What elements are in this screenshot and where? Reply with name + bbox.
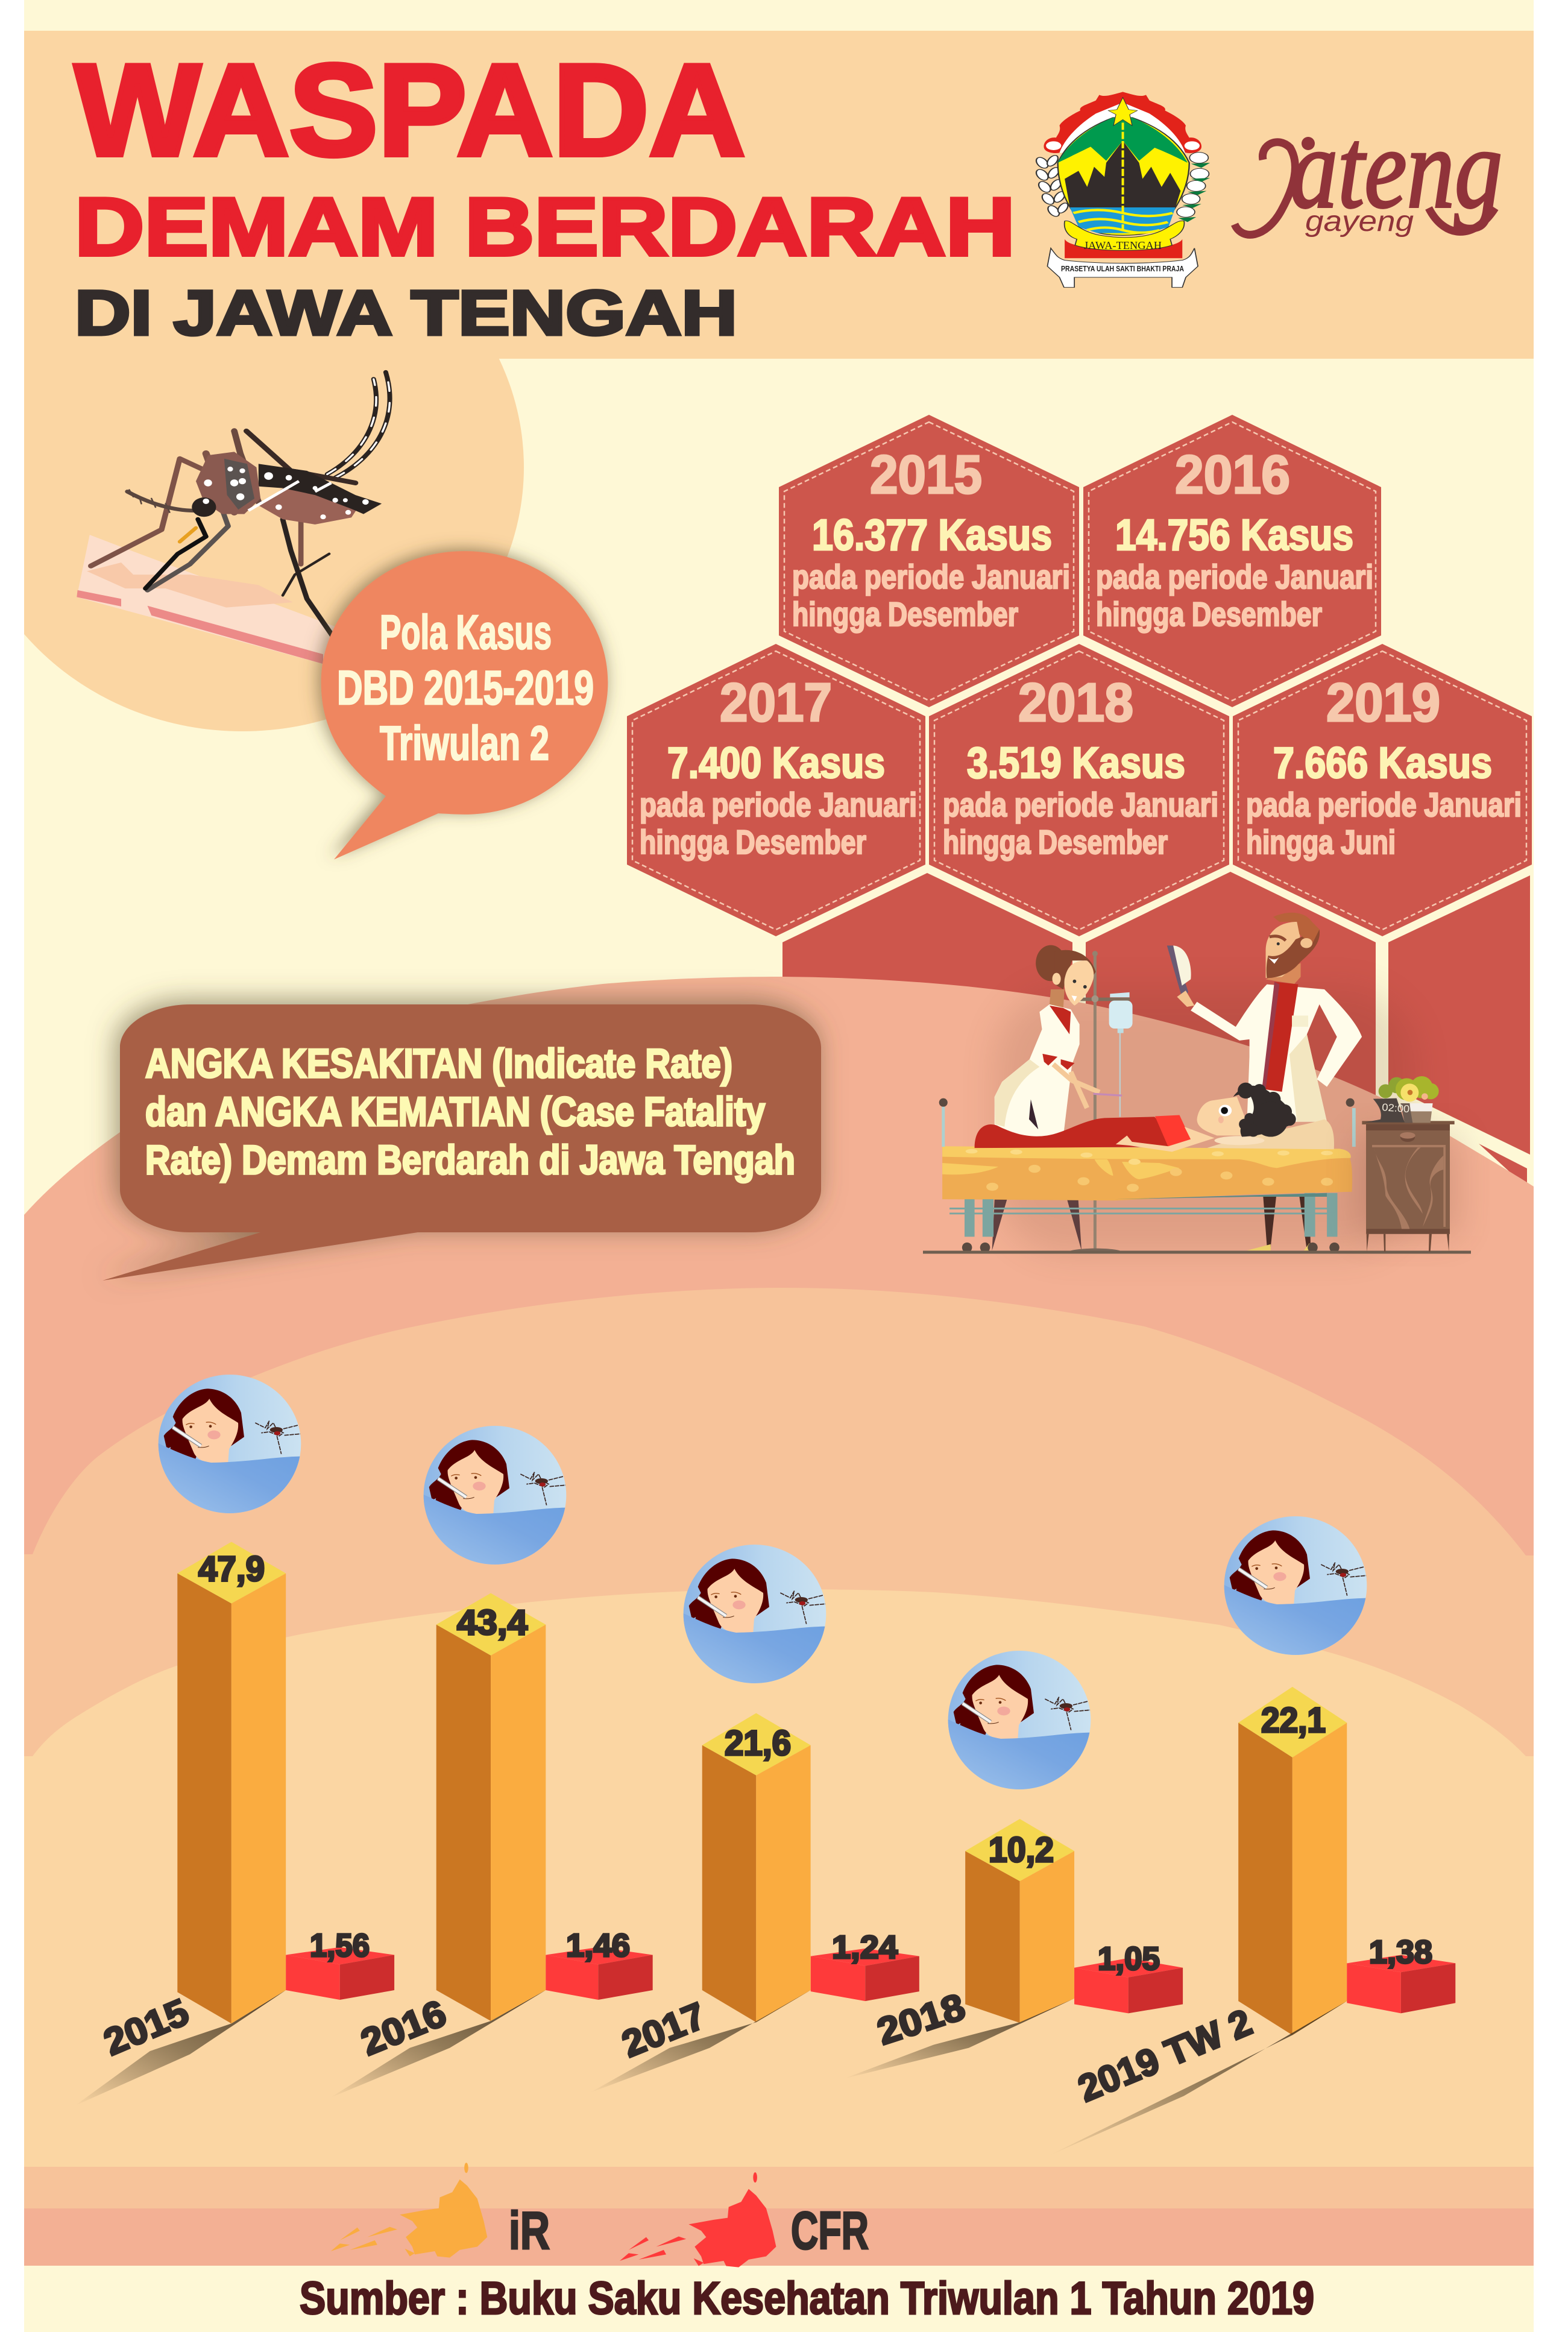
IR bar 2017 — [702, 1713, 811, 2022]
CFR bar 2015 — [286, 1947, 394, 2000]
axis labels: years — [98, 1986, 1258, 2110]
axis labels: years: 2016 — [355, 1993, 452, 2064]
icon: red splat — [620, 2172, 776, 2267]
period line 2: hingga Desember — [792, 595, 1018, 633]
bar chart: years 2017 CFR to 2019 — [811, 1687, 1455, 2155]
IR bar 2018 — [965, 1819, 1074, 2023]
icon: sick patient 2019 — [1223, 1516, 1369, 1663]
footer band — [24, 2266, 1534, 2332]
value labels: IR: 43,4 — [457, 1603, 527, 1642]
period line 1: pada periode Januari — [792, 558, 1070, 596]
year: 2016 — [1175, 445, 1290, 505]
IR bar 2016 — [436, 1593, 546, 2021]
wordmark: ateng — [1290, 106, 1502, 232]
axis labels: years: 2019 TW 2 — [1072, 2002, 1258, 2110]
panel: header band — [24, 31, 1534, 359]
callout line 3: Rate) Demam Berdarah di Jawa Tengah — [145, 1137, 795, 1183]
period line 2: hingga Desember — [1096, 595, 1322, 633]
title: DI JAWA TENGAH: DI JAWA TENGAH — [75, 278, 737, 348]
bar shadow 2016 — [330, 1990, 546, 2098]
source line: Sumber : Buku Saku Kesehatan Triwulan 1 Tahun 2019 — [300, 2273, 1314, 2324]
callout: Pola Kasus speech bubble — [321, 551, 608, 860]
year: 2018 — [1018, 673, 1133, 733]
legend label: CFR — [791, 2201, 869, 2260]
case count: 16.377 Kasus — [812, 511, 1052, 559]
panel: hexagon 2016 — [1083, 415, 1381, 707]
callout line 3: Triwulan 2 — [380, 716, 549, 770]
value labels: CFR — [310, 1927, 1432, 1977]
value labels: IR: 21,6 — [725, 1724, 791, 1763]
bar shadow 2015 — [75, 1990, 286, 2106]
period line 2: hingga Juni — [1246, 823, 1396, 861]
CFR bar 2017 — [811, 1949, 919, 2001]
callout line 1: Pola Kasus — [380, 605, 552, 659]
bar shadow 2019 — [1049, 2001, 1347, 2155]
clock reading: 02:00 — [1382, 1101, 1410, 1115]
case count: 7.400 Kasus — [667, 739, 885, 787]
callout line 1: ANGKA KESAKITAN (Indicate Rate) — [145, 1041, 732, 1086]
icon: orange splat — [331, 2163, 487, 2258]
icon: sick patient 2017 — [682, 1545, 828, 1691]
callout line 2: DBD 2015-2019 — [337, 661, 594, 714]
axis labels: years: 2018 — [872, 1986, 970, 2053]
icon: sick patient 2015 — [157, 1375, 303, 1521]
value labels: IR — [198, 1549, 1326, 1870]
period line 1: pada periode Januari — [640, 786, 917, 824]
value labels: CFR: 1,24 — [832, 1929, 898, 1965]
illustration: hospital scene — [923, 913, 1471, 1254]
value labels: CFR: 1,46 — [566, 1927, 630, 1964]
bar chart: years 2015 to 2017 — [75, 1542, 811, 2106]
period line 1: pada periode Januari — [1096, 558, 1373, 596]
value labels: CFR: 1,56 — [310, 1927, 370, 1964]
IR bar 2019 — [1238, 1687, 1347, 2035]
period line 1: pada periode Januari — [943, 786, 1218, 824]
callout: Angka Kesakitan speech bubble — [102, 1004, 821, 1281]
icon: sick patient 2016 — [422, 1426, 568, 1572]
case count: 7.666 Kasus — [1273, 739, 1492, 787]
emblem text: Jawa-Tengah: JAWA-TENGAH — [1084, 239, 1162, 251]
year: 2017 — [720, 673, 832, 733]
value labels: IR: 10,2 — [989, 1830, 1054, 1870]
title: DEMAM BERDARAH: DEMAM BERDARAH — [75, 181, 1015, 273]
legend label: iR — [509, 2201, 550, 2260]
legend: IR — [331, 2163, 550, 2260]
icon: sick patient 2018 — [946, 1651, 1093, 1797]
legend: CFR — [620, 2172, 869, 2267]
logo: Jateng Gayeng — [1235, 106, 1502, 238]
year: 2015 — [870, 445, 982, 505]
panel: hexagon 2019 — [1233, 644, 1532, 936]
axis labels: years: 2017 — [616, 1995, 711, 2066]
background circle behind mosquito — [24, 359, 524, 731]
case count: 3.519 Kasus — [967, 739, 1185, 787]
case count: 14.756 Kasus — [1115, 511, 1353, 559]
value labels: CFR: 1,05 — [1098, 1941, 1160, 1977]
legend band light — [24, 2167, 1534, 2208]
value labels: IR: 22,1 — [1261, 1701, 1326, 1740]
illustration: mosquito on skin — [77, 372, 390, 664]
CFR bar 2016 — [546, 1947, 653, 2000]
panel: hill layer 3 — [24, 1589, 1534, 2167]
CFR bar 2019 — [1347, 1955, 1455, 2013]
wordmark tagline: gayeng — [1305, 206, 1414, 238]
bar shadow 2018 — [844, 1999, 1074, 2079]
legend band dark — [24, 2208, 1534, 2266]
value labels: CFR: 1,38 — [1369, 1934, 1432, 1970]
period line 2: hingga Desember — [943, 823, 1168, 861]
CFR bar 2018 — [1074, 1958, 1183, 2013]
IR bar 2015 — [177, 1542, 286, 2023]
icon: Jawa Tengah emblem — [1034, 92, 1210, 288]
panel: hexagon 2015 — [779, 415, 1079, 707]
panel: hexagon 2017 — [627, 644, 925, 936]
illustration: bedside table with plant and clock — [1356, 1076, 1459, 1252]
value labels: IR: 47,9 — [198, 1549, 265, 1589]
wall hexagons behind illustration — [782, 872, 1530, 1188]
panel: hill layer 1 — [24, 977, 1534, 1555]
bar shadow 2017 — [590, 1990, 811, 2093]
year: 2019 — [1326, 673, 1440, 733]
period line 2: hingga Desember — [640, 823, 866, 861]
panel: hill layer 2 — [24, 1288, 1534, 1756]
emblem motto: PRASETYA ULAH SAKTI BHAKTI PRAJA — [1061, 264, 1184, 273]
axis labels: years: 2015 — [98, 1991, 195, 2064]
title: WASPADA: WASPADA — [75, 37, 745, 183]
panel: hexagon 2018 — [929, 644, 1229, 936]
callout line 2: dan ANGKA KEMATIAN (Case Fatality — [145, 1089, 765, 1135]
